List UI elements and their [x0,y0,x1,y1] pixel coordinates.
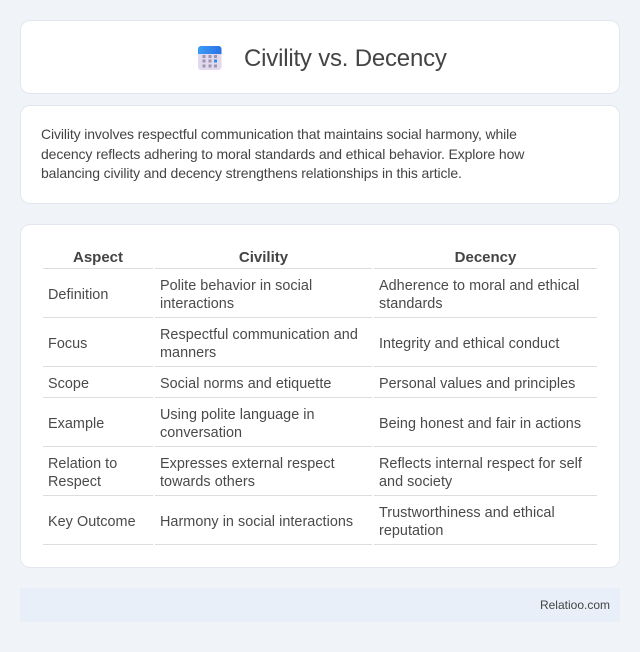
row: Definition: standards [379,296,443,312]
row: Example: Using polite language in [160,407,315,423]
panel: comparison table [20,224,620,568]
row: Scope: Personal values and principles [379,376,575,392]
row: Scope [48,376,575,392]
intro text: decency reflects adhering to moral standards and ethical behavior. Explore how [41,146,524,162]
row: Relation to Respect: and society [379,474,452,490]
row: Key Outcome: Key Outcome [48,514,136,530]
row: Definition: Polite behavior in social [160,278,312,294]
row: Key Outcome: Trustworthiness and ethical [379,505,555,521]
row: Key Outcome: reputation [379,523,443,539]
table header: Decency [455,249,516,266]
panel: intro [20,105,620,204]
row: Relation to Respect: towards others [160,474,255,490]
row: Definition [48,278,579,312]
row: Example: Being honest and fair in actions [379,416,581,432]
row: Relation to Respect: Respect [48,474,101,490]
row: Focus [48,327,560,361]
row: Definition: Adherence to moral and ethical [379,278,579,294]
icon: calendar [198,46,222,70]
row: Scope: Social norms and etiquette [160,376,331,392]
row: Focus: manners [160,345,216,361]
footer text: Relatioo.com [540,598,610,612]
panel: title card [20,20,620,94]
row: Relation to Respect: Reflects internal respect for self [379,456,582,472]
row: Definition: interactions [160,296,234,312]
table header: Aspect [73,249,123,266]
title: Civility vs. Decency [244,45,447,72]
row: Key Outcome [48,505,555,539]
row: Example: conversation [160,425,242,441]
row: Example [48,407,581,441]
intro text: Civility involves respectful communication that maintains social harmony, while [41,126,517,142]
row: Relation to Respect: Relation to [48,456,117,472]
table header [73,249,516,266]
row: Example: Example [48,416,104,432]
intro text: balancing civility and decency strengthens relationships in this article. [41,165,462,181]
row: Relation to Respect [48,456,582,490]
footer bar [20,588,620,622]
row: Focus: Focus [48,336,87,352]
row: Focus: Integrity and ethical conduct [379,336,559,352]
row: Relation to Respect: Expresses external respect [160,456,335,472]
row: Key Outcome: Harmony in social interactions [160,514,353,530]
table header: Civility [239,249,288,266]
row: Focus: Respectful communication and [160,327,358,343]
row: Definition: Definition [48,287,108,303]
row: Scope: Scope [48,376,89,392]
intro text [41,126,524,181]
